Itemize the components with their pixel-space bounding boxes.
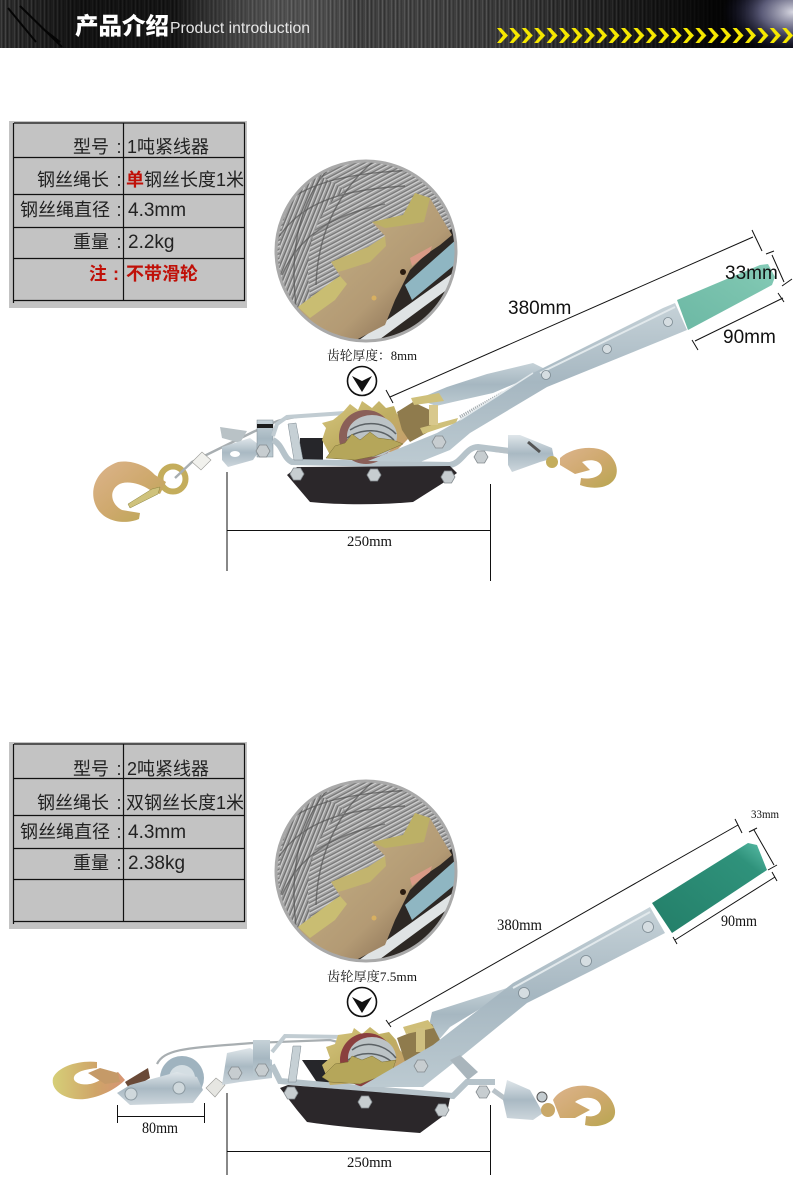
row: model: 型号: [73, 759, 109, 779]
row: note: 不带滑轮: [126, 264, 198, 284]
row: wire rope length: [37, 793, 244, 813]
frame: [273, 413, 510, 465]
heading: english subtitle: Product introduction: [170, 20, 310, 37]
row: weight: 重量: [73, 853, 109, 873]
handle rivets: [542, 318, 672, 380]
pulley block: [117, 1056, 204, 1105]
row: model: [73, 137, 209, 157]
row: wire rope length: 钢丝绳长: [37, 793, 109, 813]
row: wire rope diameter: :: [116, 200, 122, 220]
dimension: 80mm: [118, 1103, 204, 1137]
row: note: [89, 264, 198, 284]
dimension: 380mm, 2 ton: 380mm: [497, 917, 542, 934]
row: model: :: [116, 759, 122, 779]
row: model: 1吨紧线器: [127, 137, 209, 157]
circular close-up: gear teeth and wire rope, 2 ton: [270, 780, 460, 965]
row: model: 型号: [73, 137, 109, 157]
dimension: 33mm: [725, 251, 792, 286]
dimension: 90mm, 2 ton: 90mm: [721, 913, 757, 930]
row: model: :: [116, 137, 122, 157]
circular close-up: gear teeth and wire rope: [270, 160, 460, 345]
rubber grip: [677, 264, 775, 330]
dimension: 380mm: [386, 230, 762, 403]
heading: product introduction: 产品介绍: [75, 7, 169, 41]
row: model: [73, 759, 209, 779]
header banner: [0, 0, 793, 48]
icon: down arrow in circle, 2 ton: [348, 988, 376, 1016]
product photo: 1 ton cable puller: [93, 264, 775, 522]
dimension: 33mm: 33mm: [725, 263, 778, 284]
handle rivets: [518, 922, 654, 998]
icon: down arrow in circle: [348, 366, 376, 396]
decorative chevron row: [497, 28, 793, 43]
dimension: 250mm: [227, 472, 490, 581]
row: wire rope diameter: :: [116, 822, 122, 842]
label: gear thickness 7.5mm: 齿轮厚度7.5mm: [327, 969, 417, 984]
handle upper arm: [428, 987, 510, 1042]
row: wire rope length: 双钢丝长度1米: [126, 793, 244, 813]
rubber grip: [652, 843, 767, 933]
dimension: 380mm: 380mm: [508, 298, 571, 319]
row: wire rope diameter: 4.3mm: [128, 200, 186, 221]
product photo: 2 ton cable puller: [53, 843, 767, 1133]
row: weight: :: [116, 853, 122, 873]
row: wire rope diameter: [20, 822, 186, 843]
row: weight: 2.38kg: [128, 853, 185, 874]
dimension: 250mm, 2 ton: 250mm: [347, 1155, 392, 1171]
row: weight: 2.2kg: [128, 232, 174, 253]
left hook with ring: [93, 462, 186, 522]
row: wire rope length: :: [116, 170, 122, 190]
pawl bracket: [397, 393, 458, 442]
anchor bracket and clevis: [222, 1040, 272, 1085]
dimension: 90mm: [692, 293, 784, 350]
handle upper arm: [418, 363, 547, 406]
dimension: 80mm: 80mm: [142, 1120, 178, 1137]
icon: crossed tools: [8, 6, 62, 47]
row: model: 2吨紧线器: [127, 759, 209, 779]
wire ferrule: [192, 452, 211, 470]
row: wire rope length: [37, 170, 244, 190]
right hook and swivel: [450, 1055, 615, 1126]
handle main arm: [368, 303, 687, 462]
panel: specification table, 2 ton: [9, 742, 247, 929]
row: wire rope length: :: [116, 793, 122, 813]
dimension: 250mm: 250mm: [347, 534, 392, 550]
row: wire rope diameter: 钢丝绳直径: [20, 822, 110, 842]
row: wire rope length: 单: [126, 170, 144, 190]
row: wire rope diameter: 4.3mm: [128, 822, 186, 843]
ratchet gear and wire drum: [322, 401, 410, 464]
row: wire rope length: 钢丝长度1米: [144, 170, 244, 190]
dimension: 380mm, 2 ton: [386, 819, 742, 1027]
row: weight: [73, 853, 185, 874]
row: note: :: [113, 264, 119, 284]
dimension: 90mm, 2 ton: [673, 872, 777, 944]
anchor lug and clevis: [220, 420, 273, 467]
row: wire rope diameter: [20, 200, 186, 221]
row: weight: 重量: [73, 232, 109, 252]
pawl bracket: [397, 1020, 440, 1062]
right hook and swivel: [474, 435, 617, 488]
dimension: 250mm, 2 ton: [227, 1093, 490, 1175]
row: note: 注: [89, 264, 107, 284]
return spring: [460, 393, 503, 417]
ratchet gear and wire drum: [322, 1027, 408, 1087]
frame: [272, 1036, 495, 1096]
left hook: [53, 1062, 125, 1099]
dimension: 90mm: 90mm: [723, 327, 776, 348]
base plate with bolts: [280, 1085, 450, 1133]
base plate with bolts: [287, 466, 457, 504]
handle main arm: [360, 907, 665, 1087]
dimension: 33mm, 2 ton: [749, 807, 780, 870]
wire ferrule: [206, 1078, 225, 1097]
panel: specification table, 1 ton: [9, 121, 247, 308]
row: weight: :: [116, 232, 122, 252]
wire rope over pulley: [157, 1040, 395, 1064]
row: wire rope diameter: 钢丝绳直径: [20, 200, 110, 220]
wire rope: [175, 414, 350, 478]
label: gear thickness 8mm: 齿轮厚度：8mm: [327, 348, 417, 363]
dimension: 33mm, 2 ton: 33mm: [751, 807, 780, 821]
row: wire rope length: 钢丝绳长: [37, 170, 109, 190]
row: weight: [73, 232, 174, 253]
